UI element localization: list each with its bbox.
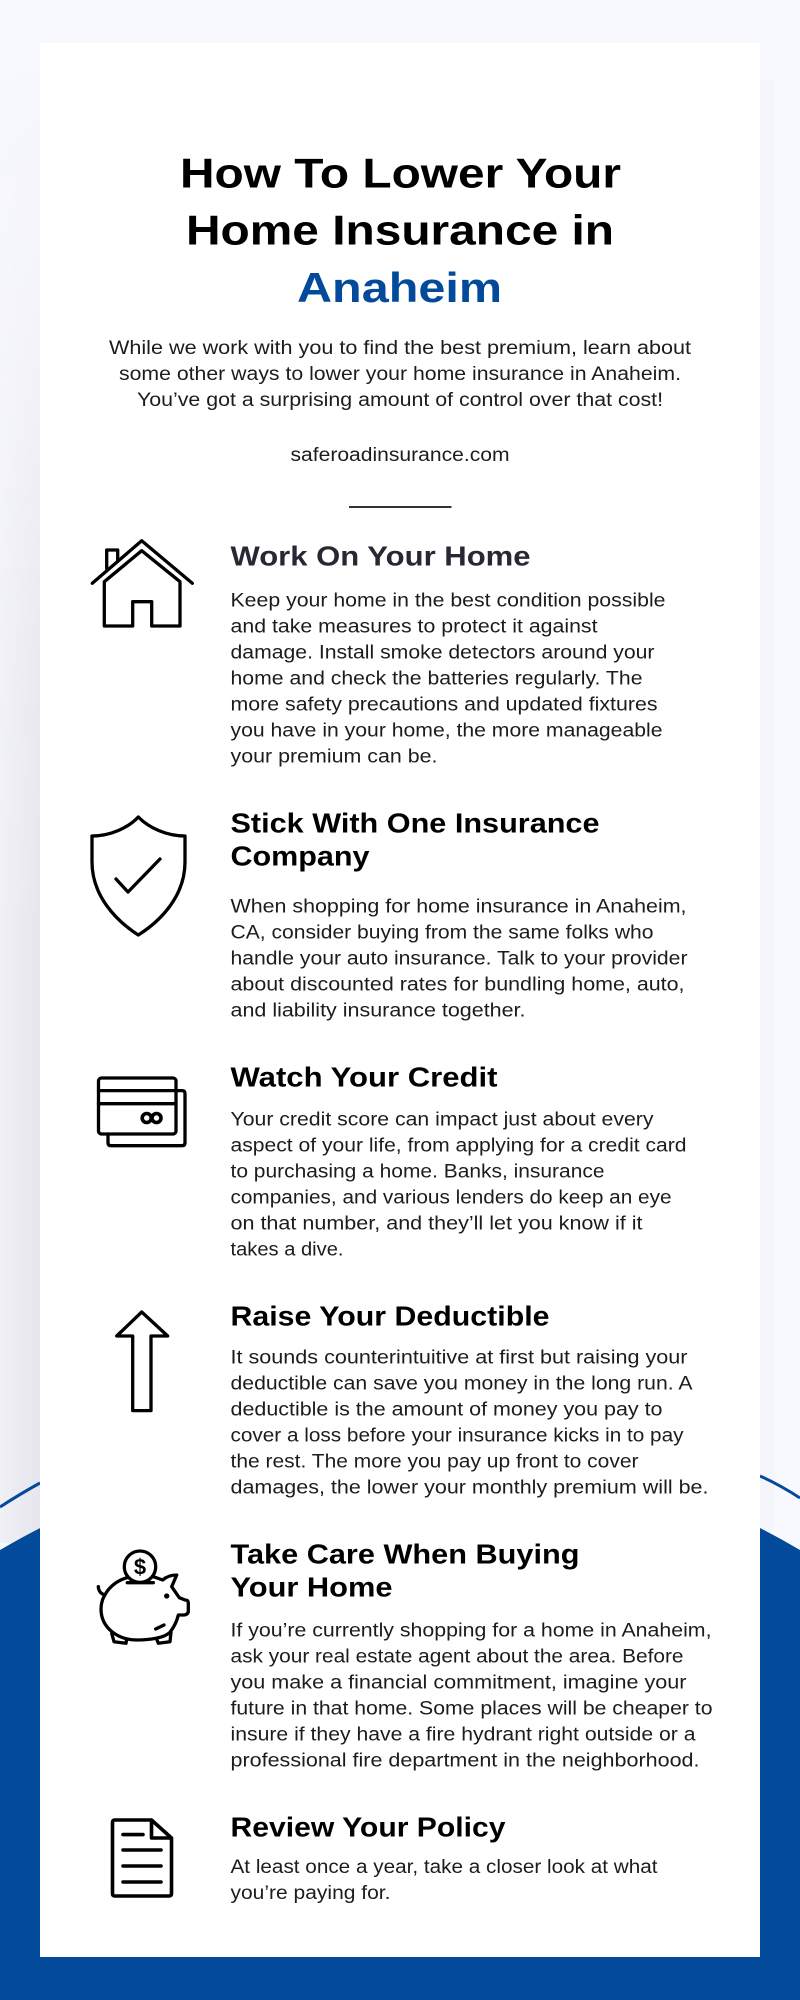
- text: watch your credit: to purchasing a home. Banks, insurance: [230, 1161, 605, 1183]
- text: watch your credit: companies, and various lenders do keep an eye: [230, 1187, 672, 1209]
- text: work on your home: you have in your home, the more manageable: [230, 720, 663, 742]
- text: raise your deductible: cover a loss before your insurance kicks in to pay: [230, 1424, 684, 1446]
- text: work on your home: your premium can be.: [230, 746, 438, 768]
- text: watch your credit: Your credit score can impact just about every: [230, 1109, 654, 1131]
- title: Anaheim: [297, 264, 502, 311]
- website: saferoadinsurance.com: [290, 444, 510, 466]
- title: [180, 150, 621, 311]
- heading: take care when buying your home: [230, 1539, 580, 1602]
- text: take care when buying your home: If you’re currently shopping for a home in Anaheim,: [230, 1619, 712, 1641]
- text: raise your deductible: the rest. The more you pay up front to cover: [230, 1450, 639, 1472]
- text: raise your deductible: It sounds counterintuitive at first but raising your: [230, 1346, 688, 1368]
- icon: shield: [92, 817, 185, 935]
- text: raise your deductible: deductible can save you money in the long run. A: [230, 1372, 693, 1394]
- text: take care when buying your home: you make a financial commitment, imagine your: [230, 1671, 687, 1693]
- text: stick with one insurance company: and liability insurance together.: [230, 1000, 526, 1022]
- heading: watch your credit: Watch Your Credit: [230, 1062, 498, 1093]
- text: raise your deductible: deductible is the amount of money you pay to: [230, 1398, 663, 1420]
- text: take care when buying your home: ask your real estate agent about the area. Before: [230, 1645, 684, 1667]
- text: work on your home: and take measures to protect it against: [230, 616, 598, 638]
- intro text: some other ways to lower your home insurance in Anaheim.: [119, 363, 681, 385]
- icon: up arrow: [117, 1312, 168, 1411]
- heading: raise your deductible: Raise Your Deductible: [230, 1301, 550, 1332]
- text: watch your credit: on that number, and they’ll let you know if it: [230, 1213, 643, 1235]
- text: review your policy: you’re paying for.: [230, 1882, 390, 1904]
- text: stick with one insurance company: [230, 896, 688, 1022]
- title: Home Insurance in: [186, 207, 614, 254]
- text: stick with one insurance company: handle your auto insurance. Talk to your provider: [230, 948, 688, 970]
- text: take care when buying your home: professional fire department in the neighborhood.: [230, 1749, 700, 1771]
- text: work on your home: Keep your home in the best condition possible: [230, 590, 666, 612]
- background: [0, 394, 40, 1543]
- text: watch your credit: [230, 1109, 686, 1261]
- text: work on your home: home and check the batteries regularly. The: [230, 668, 643, 690]
- text: raise your deductible: [230, 1346, 708, 1498]
- heading: take care when buying your home: Your Home: [230, 1571, 392, 1602]
- decorative blue arc: [0, 1441, 800, 2000]
- text: take care when buying your home: insure if they have a fire hydrant right outside or a: [230, 1723, 696, 1745]
- intro text: [109, 337, 692, 411]
- text: watch your credit: takes a dive.: [230, 1239, 344, 1261]
- heading: work on your home: Work On Your Home: [230, 541, 530, 572]
- text: work on your home: [230, 590, 666, 768]
- text: work on your home: damage. Install smoke detectors around your: [230, 642, 655, 664]
- text: take care when buying your home: future in that home. Some places will be cheaper to: [230, 1697, 713, 1719]
- icon: house: [92, 541, 192, 626]
- text: review your policy: [230, 1856, 658, 1904]
- intro text: While we work with you to find the best premium, learn about: [109, 337, 692, 359]
- heading: review your policy: Review Your Policy: [230, 1811, 506, 1842]
- text: take care when buying your home: [230, 1619, 713, 1771]
- icon: piggy bank: $: [134, 1554, 146, 1580]
- text: stick with one insurance company: about discounted rates for bundling home, auto,: [230, 974, 684, 996]
- heading: stick with one insurance company: Stick With One Insurance: [230, 807, 600, 838]
- title: How To Lower Your: [180, 150, 621, 196]
- text: review your policy: At least once a year, take a closer look at what: [230, 1856, 658, 1878]
- text: watch your credit: aspect of your life, from applying for a credit card: [230, 1135, 686, 1157]
- icon: document: [112, 1820, 172, 1896]
- text: raise your deductible: damages, the lower your monthly premium will be.: [230, 1476, 708, 1498]
- icon: credit cards: [98, 1078, 185, 1146]
- text: stick with one insurance company: CA, consider buying from the same folks who: [230, 922, 654, 944]
- text: work on your home: more safety precautions and updated fixtures: [230, 694, 658, 716]
- heading: stick with one insurance company: [230, 807, 600, 872]
- icon: piggy bank: [98, 1551, 188, 1643]
- heading: stick with one insurance company: Company: [230, 841, 370, 872]
- heading: take care when buying your home: Take Care When Buying: [230, 1539, 580, 1570]
- text: stick with one insurance company: When shopping for home insurance in Anaheim,: [230, 896, 686, 918]
- intro text: You’ve got a surprising amount of control over that cost!: [137, 389, 663, 411]
